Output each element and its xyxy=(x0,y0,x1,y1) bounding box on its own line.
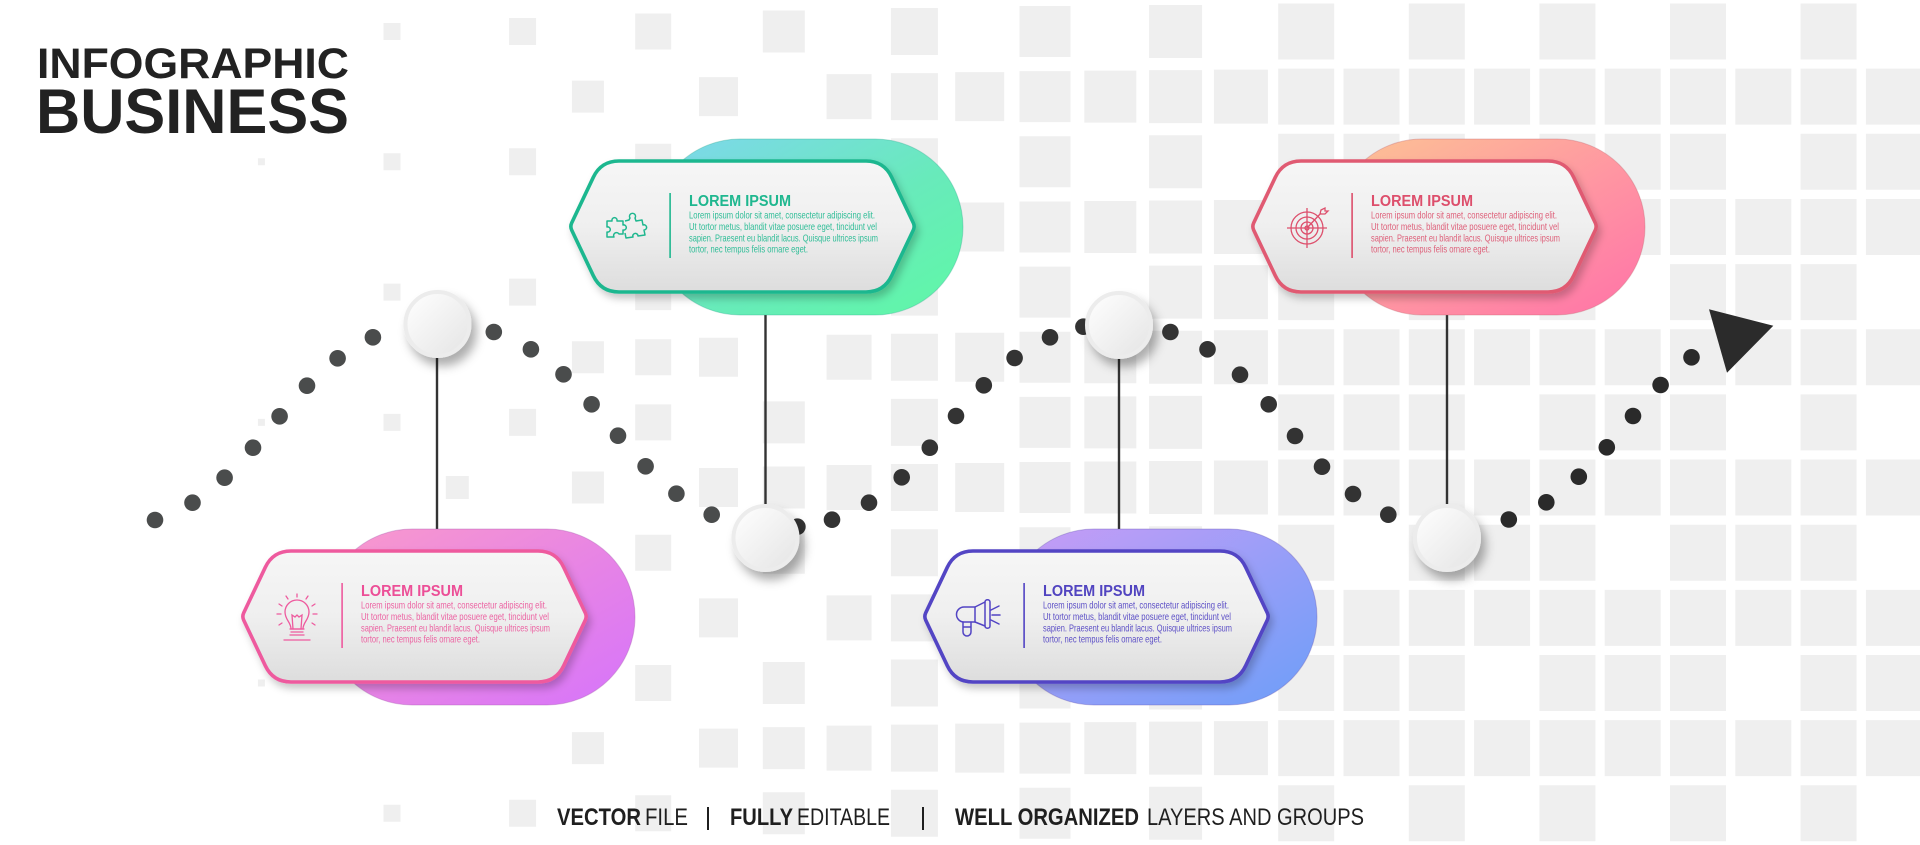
footer text xyxy=(557,804,1364,831)
icon: light bulb xyxy=(277,594,317,640)
text block: Ut tortor metus, blandit vitae posuere eget, tincidunt vel xyxy=(689,221,877,233)
text block: sapien. Praesent eu blandit lacus. Quisque ultrices ipsum xyxy=(1371,232,1560,244)
divider xyxy=(341,583,343,648)
dotted wave path xyxy=(147,318,1700,535)
text block: Lorem ipsum dolor sit amet, consectetur adipiscing elit. xyxy=(1043,600,1229,612)
footer text: VECTOR xyxy=(557,804,641,831)
text block xyxy=(689,210,878,256)
panel: purple megaphone card xyxy=(925,529,1317,705)
footer text: LAYERS AND GROUPS xyxy=(1147,804,1364,831)
text block: Ut tortor metus, blandit vitae posuere eget, tincidunt vel xyxy=(1371,221,1559,233)
heading: LOREM IPSUM xyxy=(1371,193,1473,210)
heading: LOREM IPSUM xyxy=(1043,583,1145,600)
icon: puzzle xyxy=(607,213,647,238)
red pill backing xyxy=(1334,139,1645,315)
title: BUSINESS xyxy=(36,77,349,147)
text block: sapien. Praesent eu blandit lacus. Quisque ultrices ipsum xyxy=(689,232,878,244)
text block: sapien. Praesent eu blandit lacus. Quisque ultrices ipsum xyxy=(361,622,550,634)
hexagon body xyxy=(1253,161,1596,292)
text block: tortor, nec tempus felis ornare eget. xyxy=(1043,634,1162,646)
footer text: WELL ORGANIZED xyxy=(955,804,1139,831)
text block xyxy=(1043,600,1232,646)
heading: LOREM IPSUM xyxy=(689,193,791,210)
text block: Ut tortor metus, blandit vitae posuere eget, tincidunt vel xyxy=(1043,611,1231,623)
text block xyxy=(1371,210,1560,256)
divider xyxy=(1023,583,1025,648)
panel: red target card xyxy=(1253,139,1645,315)
text block: tortor, nec tempus felis ornare eget. xyxy=(689,244,808,256)
text block: tortor, nec tempus felis ornare eget. xyxy=(361,634,480,646)
panel: green puzzle card xyxy=(571,139,963,315)
title xyxy=(36,40,349,147)
heading: LOREM IPSUM xyxy=(361,583,463,600)
green pill backing xyxy=(652,139,963,315)
hexagon body xyxy=(925,551,1268,682)
timeline nodes xyxy=(406,292,1479,570)
footer text: FILE xyxy=(645,804,688,831)
footer text: FULLY xyxy=(730,804,793,831)
panel: pink bulb card xyxy=(243,529,635,705)
text block: sapien. Praesent eu blandit lacus. Quisque ultrices ipsum xyxy=(1043,622,1232,634)
purple pill backing xyxy=(1006,529,1317,705)
text block: tortor, nec tempus felis ornare eget. xyxy=(1371,244,1490,256)
text block xyxy=(361,600,550,646)
pink pill backing xyxy=(324,529,635,705)
text block: Ut tortor metus, blandit vitae posuere eget, tincidunt vel xyxy=(361,611,549,623)
divider xyxy=(669,193,671,258)
icon: megaphone xyxy=(956,600,1000,636)
text block: Lorem ipsum dolor sit amet, consectetur adipiscing elit. xyxy=(689,210,875,222)
arrow head xyxy=(1709,309,1773,373)
hexagon body xyxy=(571,161,914,292)
text block: Lorem ipsum dolor sit amet, consectetur adipiscing elit. xyxy=(1371,210,1557,222)
title: INFOGRAPHIC xyxy=(37,40,349,88)
text block: Lorem ipsum dolor sit amet, consectetur adipiscing elit. xyxy=(361,600,547,612)
footer text: EDITABLE xyxy=(797,804,890,831)
divider xyxy=(1351,193,1353,258)
connector lines xyxy=(437,315,1447,530)
icon: target xyxy=(1287,208,1328,248)
hexagon body xyxy=(243,551,586,682)
